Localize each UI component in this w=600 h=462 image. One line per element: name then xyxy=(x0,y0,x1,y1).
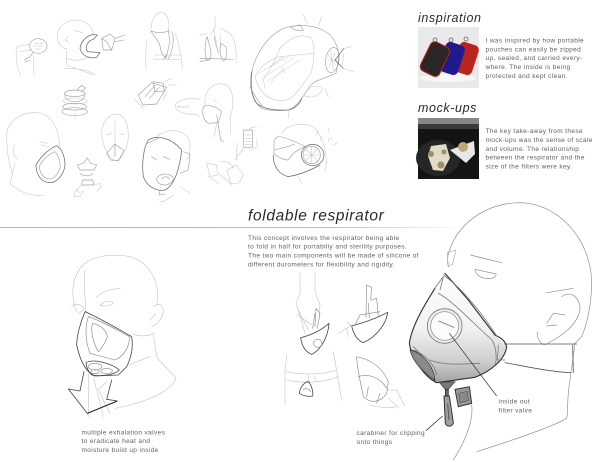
sketch: mask with fan filter and music notes xyxy=(273,124,337,183)
text: inspiration description: up, sealed, and carried every- xyxy=(486,55,583,62)
sketch: back harness xyxy=(200,17,236,63)
illustration: head with exhalation valves xyxy=(68,255,176,417)
heading: foldable respirator: foldable respirator xyxy=(248,208,385,224)
text: concept description: This concept involves the respirator being able xyxy=(248,235,399,242)
mask body xyxy=(409,273,507,383)
sketch: side head pulling mask xyxy=(203,84,233,142)
caption: exhalation valves: to eradicate heat and xyxy=(82,438,150,445)
heading: inspiration: inspiration xyxy=(418,11,482,25)
sketch: hands and phone, mask xyxy=(207,161,243,185)
carabiner clip xyxy=(439,382,455,426)
text: mock-ups description: The key take-away from these xyxy=(486,128,583,135)
text: mock-ups description: size of the filters were key. xyxy=(486,164,572,171)
text: inspiration description: protected and kept clean. xyxy=(486,73,568,80)
sketch: hand holding folded mask xyxy=(296,273,329,354)
caption: exhalation valves: moisture build up inside xyxy=(82,447,159,454)
caption: carabiner: carabiner for clipping xyxy=(356,430,425,437)
caption: filter valve: filter valve xyxy=(498,407,532,414)
filter valve ring xyxy=(427,309,462,343)
text: concept description: to fold in half for portabiliy and sterility purposes. xyxy=(248,244,407,251)
text: concept description: different durometers for flexibility and rigidity. xyxy=(248,262,395,268)
photo: paper mock-ups xyxy=(416,118,479,179)
small sketches: folding and carrying xyxy=(285,273,405,408)
sketch: phone speech bubble xyxy=(16,39,47,75)
concept sketches: centre group xyxy=(200,15,353,185)
caption: exhalation valves: multiple exhalation valves xyxy=(82,430,166,436)
text: concept description: The two main components will be made of silicone of xyxy=(248,252,419,260)
text: mock-ups description: between the respirator and the xyxy=(486,155,585,162)
text: inspiration description: where. The inside is being xyxy=(484,64,571,71)
head outline xyxy=(447,203,592,460)
text: inspiration description: I was inspired by how portable xyxy=(486,38,584,44)
sketch: mask profile xyxy=(57,20,125,75)
concept sketches: left group xyxy=(7,13,200,202)
large full head helmet sketch xyxy=(250,15,353,118)
sketch: large head with mask xyxy=(7,113,65,195)
neck strap xyxy=(503,344,577,373)
sketch: mask clipped to belt xyxy=(285,352,342,405)
text: mock-ups description: mock-ups was the sense of scale xyxy=(486,137,593,144)
caption: filter valve: inside out xyxy=(498,398,530,405)
sketch: full face respirator xyxy=(143,131,190,202)
sketch: front head with small mask xyxy=(102,114,128,161)
photo: zipped pouches xyxy=(418,27,480,88)
sketch: valve stack with hands xyxy=(74,158,101,197)
heading: mock-ups: mock-ups xyxy=(418,101,477,115)
divider line xyxy=(0,227,470,228)
main illustration: respirator on head xyxy=(409,203,592,460)
strap buckle xyxy=(455,387,472,407)
caption: carabiner: onto things xyxy=(356,439,393,446)
sketch: hello speech bubble: HELLO! xyxy=(177,105,189,109)
sketch: hello speech bubble xyxy=(175,98,200,117)
leader lines xyxy=(449,333,497,396)
sketch: hand with phone xyxy=(235,127,257,160)
sketch: chest harness figure xyxy=(146,13,182,68)
sketch: folded mask with straps xyxy=(338,285,388,343)
sketch: hands and device xyxy=(135,78,177,108)
sketch: hand folding mask xyxy=(357,357,405,408)
text: inspiration description: pouches can easily be zipped xyxy=(486,46,581,53)
text: mock-ups description: and volume. The relationship xyxy=(486,146,579,153)
sketch: stacked rings device xyxy=(62,85,87,118)
